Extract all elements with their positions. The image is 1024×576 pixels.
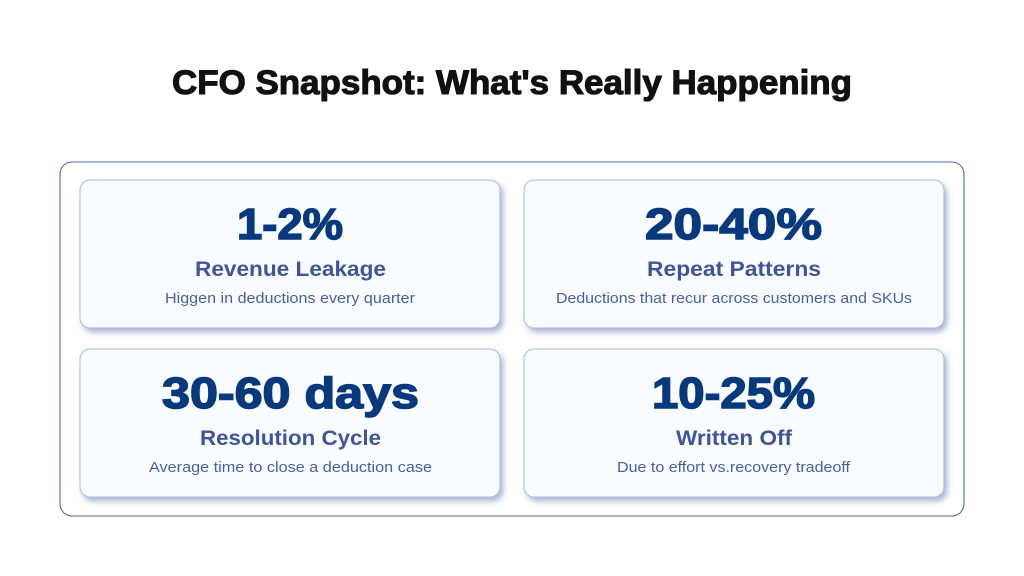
panel: resolution cycle card bbox=[80, 349, 500, 497]
label: written off: Written Off bbox=[676, 427, 793, 450]
panel: repeat patterns card bbox=[524, 180, 944, 328]
description: written off: Due to effort vs.recovery tradeoff bbox=[617, 460, 851, 476]
description: repeat patterns: Deductions that recur across customers and SKUs bbox=[556, 291, 912, 307]
stat: 10-25%: 10-25% bbox=[652, 369, 815, 418]
label: repeat patterns: Repeat Patterns bbox=[647, 258, 821, 281]
stat: 20-40%: 20-40% bbox=[645, 200, 822, 249]
description: revenue leakage: Higgen in deductions every quarter bbox=[165, 291, 415, 307]
panel: written off card bbox=[524, 349, 944, 497]
label: resolution cycle: Resolution Cycle bbox=[200, 427, 381, 450]
panel: metrics container bbox=[60, 162, 964, 516]
stat: 1-2%: 1-2% bbox=[237, 200, 343, 249]
stat: 30-60 days: 30-60 days bbox=[162, 369, 419, 418]
title: CFO Snapshot: What's Really Happening bbox=[172, 64, 852, 102]
panel: revenue leakage card bbox=[80, 180, 500, 328]
description: resolution cycle: Average time to close a deduction case bbox=[149, 460, 432, 476]
label: revenue leakage: Revenue Leakage bbox=[195, 258, 386, 281]
